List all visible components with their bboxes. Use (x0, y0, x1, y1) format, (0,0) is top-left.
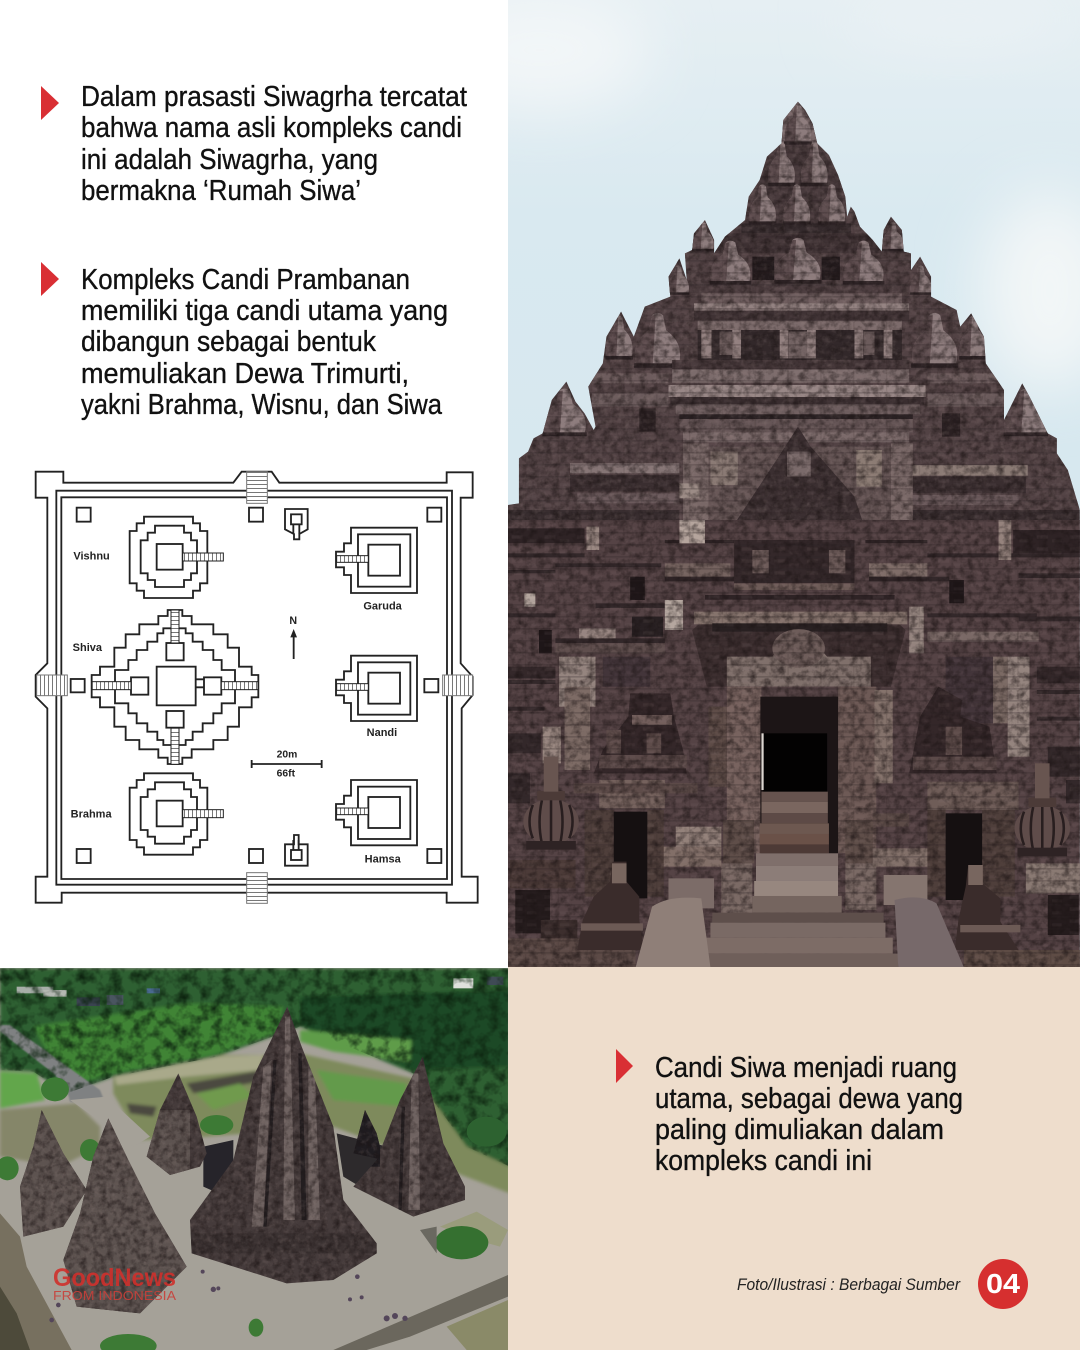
GoodNews logo: GoodNews (53, 1264, 176, 1292)
stonework texture (508, 80, 1080, 530)
page number badge (978, 1259, 1028, 1309)
page number badge: 04 (986, 1268, 1020, 1299)
plan labels: Shiva (73, 642, 103, 654)
plan labels: Nandi (367, 727, 397, 739)
small pyramids at base (577, 862, 1020, 950)
central relief niche (683, 443, 708, 520)
tree texture (0, 968, 510, 1168)
scale bar (252, 750, 322, 780)
central door opening (760, 697, 838, 853)
left wall ruins (0, 1213, 72, 1350)
plan labels (71, 550, 403, 865)
central gate hood (692, 624, 906, 686)
plan labels: Garuda (363, 601, 403, 613)
dark coursing left (508, 553, 665, 803)
small perimeter shrines (71, 508, 441, 863)
photo: Shiva temple with sky (508, 0, 1080, 967)
side doors (614, 812, 982, 900)
white background panel (0, 0, 508, 968)
text block: tiga candi utama (41, 262, 448, 421)
visitors (49, 1270, 408, 1322)
beige panel (508, 967, 1080, 1350)
GoodNews logo (53, 1264, 176, 1303)
right bell ornament (1015, 763, 1070, 856)
tree band (0, 968, 510, 1167)
aerial photo of Prambanan (0, 960, 510, 1350)
text block: tiga candi utama: memuliakan Dewa Trimurti, (81, 358, 409, 390)
central coursing (665, 540, 927, 600)
houses (17, 977, 503, 1006)
spire (745, 102, 847, 223)
side door jambs (585, 810, 614, 897)
tiers of stupas (784, 104, 812, 145)
side stepped blocks (661, 847, 721, 867)
makara balustrades (636, 875, 964, 967)
bright canopy (33, 1003, 283, 1087)
side lintels (599, 780, 665, 808)
sky (508, 0, 1080, 950)
dark canopy right (300, 990, 510, 1070)
bullet arrow 3 (616, 1049, 633, 1083)
bullet arrow 1 (41, 86, 59, 120)
bushes (0, 1077, 507, 1350)
relief panels (603, 657, 650, 687)
temple lower facade (508, 520, 1080, 967)
text block: Siwagrha: Dalam prasasti Siwagrha tercatat (81, 81, 467, 113)
text block: Candi Siwa (616, 1049, 963, 1177)
scale bar: 20m (277, 750, 297, 761)
text block: Candi Siwa: utama, sebagai dewa yang (655, 1083, 963, 1115)
outer wall (36, 472, 478, 903)
inner walls (56, 491, 452, 885)
north arrow (289, 615, 297, 659)
plan labels: Hamsa (365, 853, 402, 865)
left bell ornament (523, 757, 579, 850)
lawn right (300, 1030, 412, 1062)
temples (0, 993, 510, 1327)
dark coursing right (927, 553, 1080, 803)
text block: Candi Siwa: kompleks candi ini (655, 1145, 872, 1177)
text block: tiga candi utama: Kompleks Candi Prambanan (81, 264, 410, 296)
road (0, 1025, 107, 1107)
bullet arrow 2 (41, 262, 59, 296)
text block: Siwagrha: ini adalah Siwagrha, yang (81, 144, 378, 176)
field and ruins (113, 1053, 510, 1193)
text block: tiga candi utama: memiliki tiga candi utama yang (81, 295, 448, 327)
dark ruin strips (126, 1070, 256, 1118)
gate stairs (37, 472, 473, 903)
text block: tiga candi utama: yakni Brahma, Wisnu, dan Siwa (81, 389, 443, 421)
Brahma temple (130, 773, 223, 855)
text block: Siwagrha (41, 81, 467, 207)
temple upper tower (508, 80, 1080, 530)
Hamsa temple (336, 780, 417, 845)
guardian blocks (723, 820, 754, 863)
left ground (0, 1103, 100, 1167)
landscape (0, 968, 510, 1193)
horizontal mouldings (701, 293, 902, 303)
GoodNews logo: FROM INDONESIA (53, 1288, 176, 1303)
text block: Candi Siwa: Candi Siwa menjadi ruang (655, 1052, 957, 1084)
Vishnu temple (130, 517, 223, 598)
stonework texture lower (508, 520, 1080, 967)
photo credit: Foto/Ilustrasi : Berbagai Sumber (737, 1276, 961, 1294)
text block: Siwagrha: bahwa nama asli kompleks candi (81, 112, 462, 144)
Nandi temple (336, 656, 417, 721)
Shiva temple (92, 610, 258, 764)
Garuda temple (336, 528, 417, 593)
north gate shrine (285, 509, 308, 539)
lawn left (0, 1071, 45, 1108)
text block: Candi Siwa: paling dimuliakan dalam (655, 1114, 944, 1146)
small wall shrines (594, 693, 687, 773)
text block: Siwagrha: bermakna ‘Rumah Siwa’ (81, 175, 361, 207)
site plan diagram (36, 472, 478, 903)
pilasters (559, 657, 596, 707)
upper facade bands (508, 528, 585, 543)
south gate shrine (285, 835, 308, 866)
north arrow: N (289, 615, 297, 627)
boundary wall (333, 1275, 508, 1350)
door frame (727, 687, 761, 853)
plan labels: Vishnu (73, 550, 110, 562)
scale bar: 66ft (277, 769, 296, 780)
text block: tiga candi utama: dibangun sebagai bentuk (81, 326, 376, 358)
plan labels: Brahma (71, 809, 112, 821)
ribs on main tower (252, 1017, 420, 1227)
shadows (203, 1140, 233, 1200)
grass patch (440, 1212, 508, 1247)
entrance stairs (699, 853, 898, 967)
